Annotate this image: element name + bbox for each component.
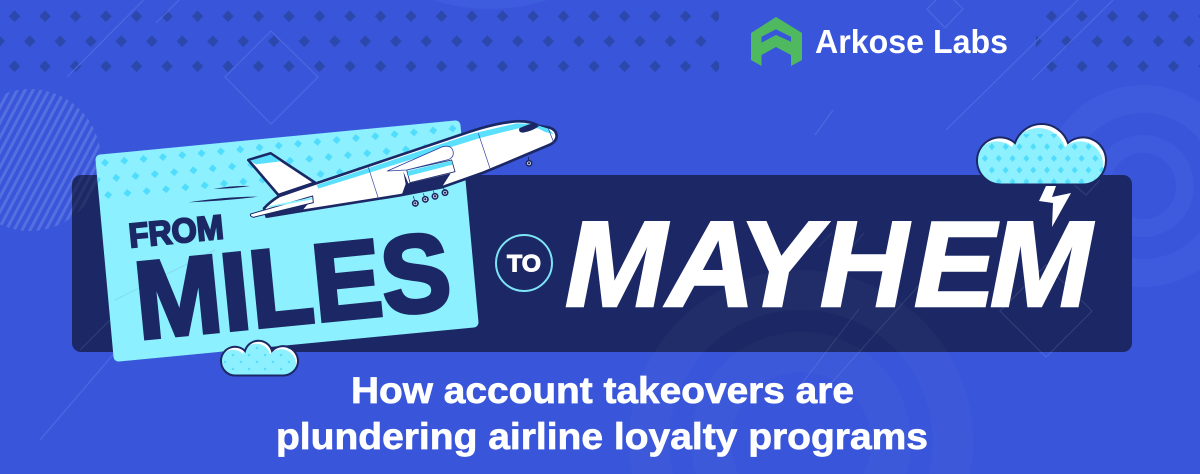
panel: tilted boarding-pass card (84, 120, 474, 363)
title banner panel (72, 175, 1132, 352)
heading: MAYHEM: Y (738, 196, 829, 332)
icon: small cloud below card (219, 341, 298, 378)
panel and lower background rings (0, 89, 1100, 474)
heading: FROM: FROM (127, 208, 225, 255)
subtitle line 2: plundering airline loyalty programs (276, 416, 928, 457)
heading: MAYHEM: M (990, 196, 1094, 332)
background diamond pattern (0, 0, 1200, 78)
fuselage (264, 121, 557, 217)
logo: Arkose Labs (751, 17, 1008, 66)
heading: MAYHEM: E (914, 196, 999, 332)
icon: green hexagon chevron (751, 17, 802, 66)
badge: TO (496, 235, 552, 291)
subtitle line 1: How account takeovers are (351, 370, 854, 411)
icon: airplane taking off (188, 121, 557, 217)
horizontal stabiliser (250, 196, 313, 217)
heading: MAYHEM: M (565, 196, 669, 332)
heading: MAYHEM: A (664, 196, 755, 332)
icon: lightning bolt (1039, 186, 1071, 227)
heading: MAYHEM: H (820, 196, 911, 332)
logo wordmark: Arkose Labs (815, 23, 1008, 60)
vertical tail fin (248, 153, 315, 195)
heading: MILES: MILES (129, 210, 456, 363)
subtitle (276, 370, 928, 457)
icon: storm cloud (974, 124, 1107, 188)
badge: TO: TO (507, 250, 541, 278)
wing and engine underside (387, 146, 455, 195)
landing gear wheels (413, 157, 532, 206)
speed lines (188, 186, 258, 202)
